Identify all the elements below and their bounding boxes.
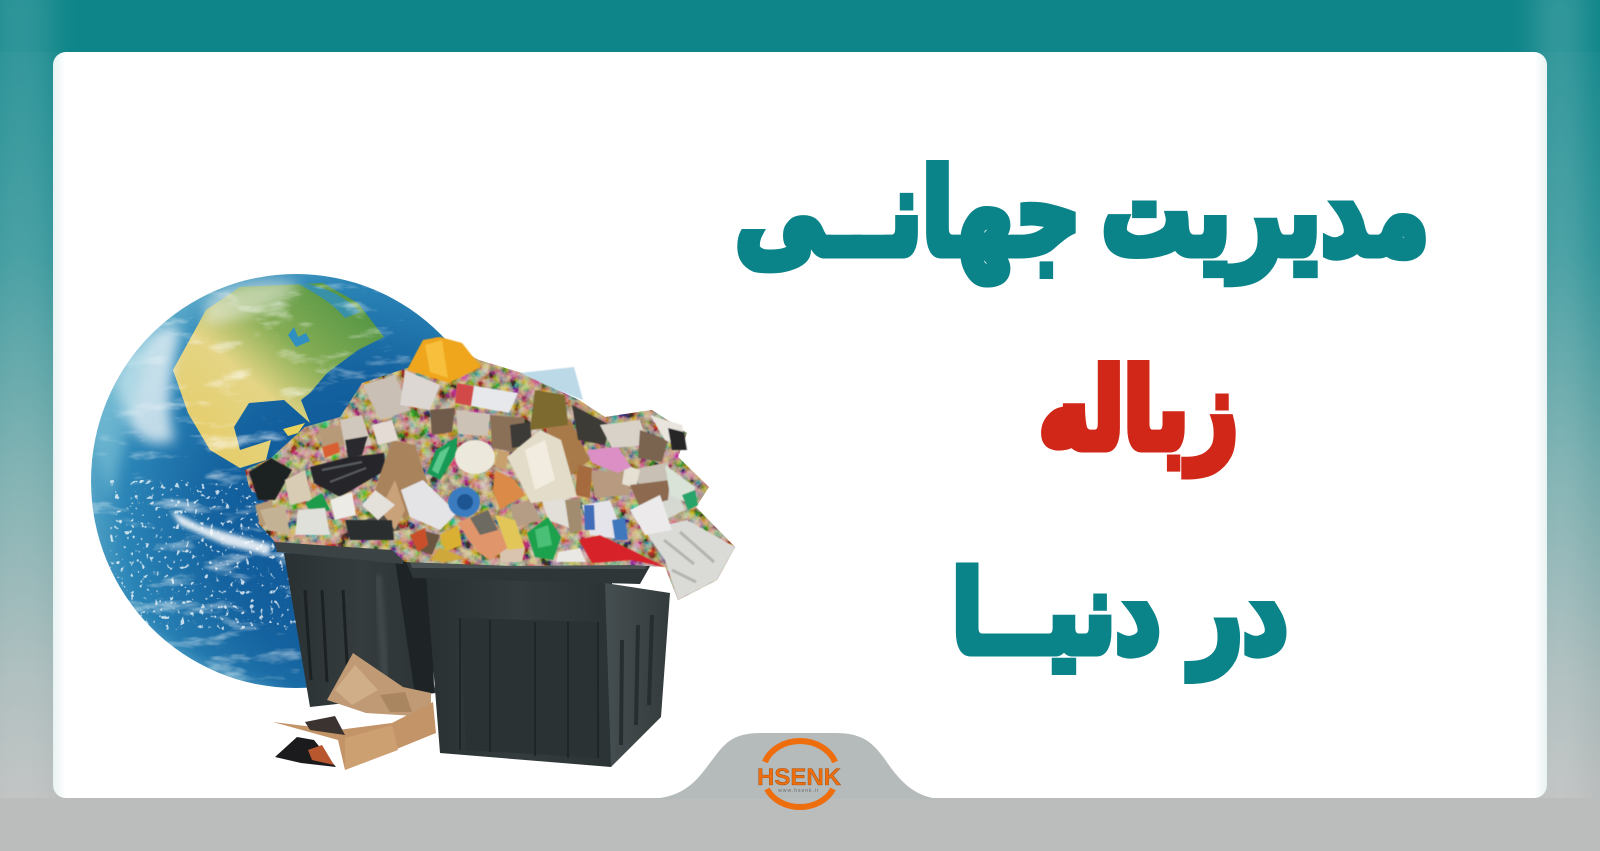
green bottle (427, 437, 457, 480)
bottle (455, 383, 518, 413)
blue cap (448, 487, 480, 517)
logo: HSENK: www.hsenk.ir (778, 788, 820, 794)
bottom tab holding the logo (650, 733, 940, 799)
white items left (295, 508, 330, 535)
white bit above rim (556, 548, 586, 562)
orange carton (493, 470, 525, 510)
white round container (455, 440, 495, 474)
white plastic bag right (644, 520, 735, 600)
title: red word: زباله (1039, 346, 1238, 475)
brown paper (375, 440, 430, 520)
green cap small (305, 493, 330, 514)
title: last line: در دنیــا (952, 549, 1288, 679)
icon: large front bin (405, 559, 670, 767)
logo: HSENK: HSENK (757, 764, 842, 791)
white bag (401, 480, 457, 530)
land: north america (173, 283, 384, 468)
product packs right (582, 500, 625, 540)
icon: crushed cardboard (273, 653, 436, 770)
icon: globe (91, 274, 446, 688)
green jug (527, 517, 561, 560)
clouds (91, 283, 413, 681)
peach box (457, 510, 509, 560)
yellow items (440, 525, 462, 552)
scraps (340, 415, 372, 450)
black bag at base (275, 737, 336, 767)
logo: HSENK (757, 741, 842, 807)
pink wrapper (587, 447, 631, 473)
icon: small rear bin (273, 538, 436, 707)
red bag (579, 535, 665, 567)
white sheet (507, 430, 577, 503)
icon: garbage heap (245, 335, 740, 605)
orange cloth (407, 337, 481, 383)
black bags (249, 458, 292, 500)
light blue box (520, 367, 583, 400)
